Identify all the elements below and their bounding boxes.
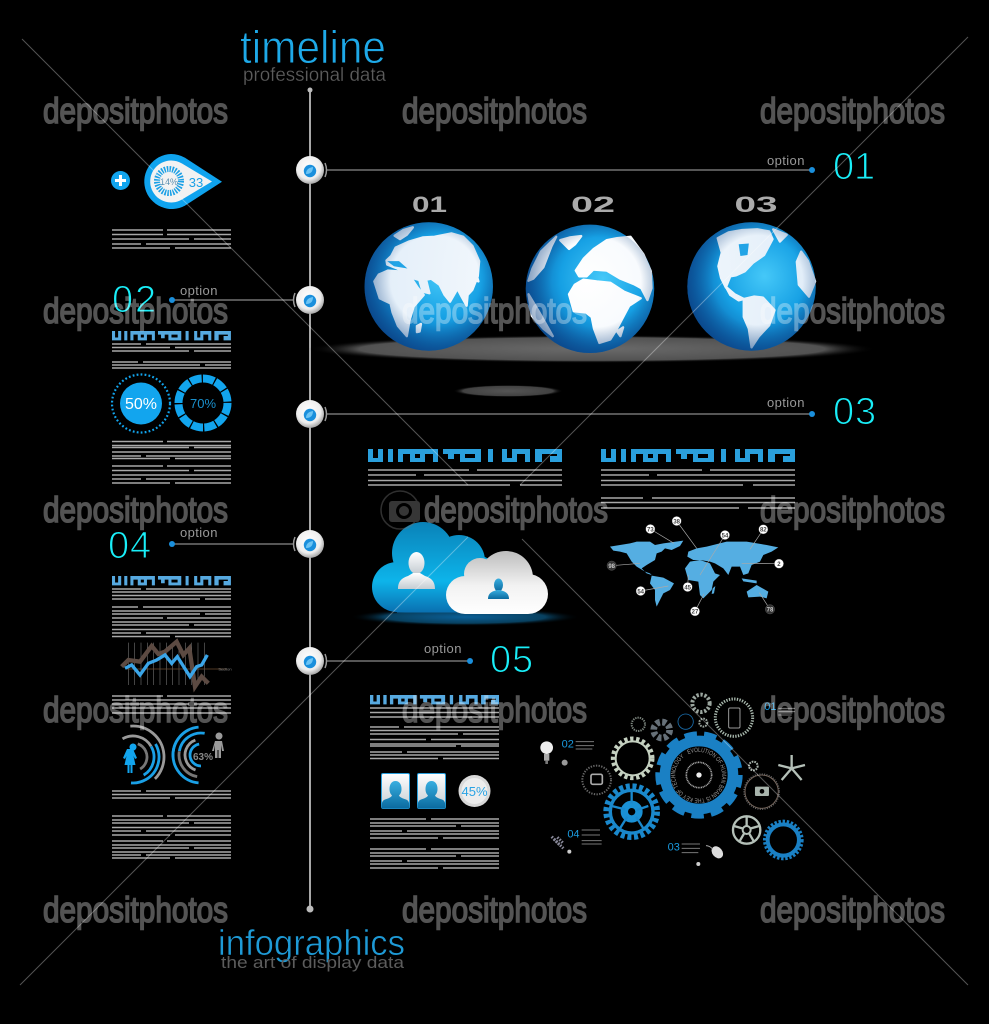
main blue gear [655,731,743,819]
connector 02 [112,279,294,321]
heading bar [370,695,499,704]
timeline node 1 [296,156,326,184]
connector 04 [108,525,294,567]
timeline node 4 [294,530,324,558]
gear label 01 [764,701,795,715]
map callouts: 54 [637,589,645,595]
connector 03: 03 [833,391,876,433]
label 01: 01 [412,192,447,217]
chart: radial arcs with female figure [97,721,169,793]
text lines [370,708,499,758]
icon: portrait 1 [382,774,410,808]
blue cog [606,786,657,837]
watermarks [43,90,945,930]
text lines [112,344,231,368]
watermarks: depositphotos [424,489,608,530]
text lines [112,230,231,248]
watermarks: depositphotos [402,90,587,131]
icon: watermark camera [381,491,420,529]
map callouts: 78 [767,608,774,614]
icon: female figure [123,744,137,773]
chart: world map with callouts [607,516,784,616]
phone cog [715,699,753,736]
icon: light bulb [540,741,553,764]
watermarks: depositphotos [760,90,945,131]
camera cog [744,774,779,809]
map callouts: 82 [760,528,767,534]
globe 2 [526,225,654,353]
icon: clouds with users [350,522,580,626]
floor shadows under globes [308,335,876,397]
connector 02: option [180,283,218,298]
heading bar [112,576,231,585]
connector 01 [326,146,875,188]
heading bar [112,331,231,340]
connector 05 [326,639,533,681]
heading bar [601,449,795,462]
icon: male figure [212,733,224,758]
watermarks: depositphotos [760,889,945,930]
watermarks: depositphotos [43,290,228,331]
timeline node 2 [294,286,324,314]
watermarks: depositphotos [760,489,945,530]
title: timeline: timeline [240,21,386,73]
chart: 70% ring [178,378,228,428]
watermarks: depositphotos [402,889,587,930]
text lines [601,470,795,508]
connector 05: 05 [490,639,533,681]
gear label 03 [668,842,700,866]
chart: 45% badge: 45% [461,784,488,799]
icon: location pin with percentage: 33 [189,175,203,190]
connector 03 [326,391,876,433]
gear label 02 [562,739,594,766]
icon: dotted arrow [552,837,563,848]
panel: middle text right [601,449,795,508]
gear label 04 [567,828,602,854]
map callouts: 73 [647,527,654,533]
map callouts: 54 [722,533,729,539]
watermarks: depositphotos [760,290,945,331]
chart: radial arcs with male figure and 63% [171,725,231,785]
icon: user silhouette [398,552,435,589]
gear label 03: 03 [668,842,680,854]
title: infographics: infographics [218,922,405,963]
icon: blue cloud [372,522,496,612]
map leader lines [612,521,779,611]
label 03: 03 [734,192,778,217]
watermarks: depositphotos [760,689,945,730]
icon: mouse [706,844,725,861]
text lines [112,696,231,713]
title: timeline: professional data [243,65,386,86]
gear label 02: 02 [562,739,574,751]
connector 01: option [767,153,805,168]
main blue gear: EVOLUTION OF HUMAN BRAIN IS THE KEY OF TECHNOLOGY [670,748,726,803]
icon: plus button [111,171,130,190]
pale cog [613,739,652,778]
map callouts: 38 [673,519,681,525]
map callouts: 27 [692,610,699,616]
label 02: 02 [571,192,615,217]
star wheel [778,755,805,780]
chart: 50% ring [112,374,170,432]
chart: 45% badge [458,775,490,807]
spoked wheel [733,816,760,844]
panel: section 05 text [370,695,499,868]
chart: 50% ring: 50% [125,396,157,413]
connector 04: option [180,525,218,540]
dark cog with screen icon [582,766,611,794]
title: infographics: the art of display data [221,953,405,972]
text lines [112,442,231,483]
icon: location pin with percentage: 14% [160,177,178,187]
map callouts: 98 [608,564,616,570]
chart: 70% ring: 70% [190,396,216,411]
icon: portrait 2 [418,774,446,808]
gear label 04: 04 [567,828,580,840]
gear label 01: 01 [764,701,777,713]
vertical timeline axis [306,88,314,912]
globe 3 [687,222,816,351]
text lines [368,470,562,485]
connector 03: option [767,395,805,410]
watermarks: depositphotos [43,489,228,530]
watermarks: depositphotos [402,290,587,331]
chart: gear diagram [540,692,806,866]
icon: user silhouette [488,578,509,599]
panel: left column [97,154,232,858]
map land [610,541,778,607]
panel: globes [365,192,816,353]
watermarks: depositphotos [43,90,228,131]
timeline node 5 [296,647,326,675]
text lines [370,819,499,868]
map callouts: 2 [777,562,781,568]
small cogs [632,695,758,770]
chart: line chart [122,642,232,687]
watermarks: depositphotos [43,889,228,930]
icon: white cloud [446,551,548,614]
connector 02: 02 [112,279,156,321]
map callouts [607,516,784,616]
connector 04: 04 [108,525,151,567]
icon: location pin with percentage [144,154,222,209]
connector 01: 01 [833,146,875,188]
chart: line chart: Section [218,667,232,672]
chart: radial arcs with male figure and 63%: 63% [193,752,213,763]
heading bar [368,449,562,462]
connector 05: option [424,641,462,656]
timeline node 3 [296,400,326,428]
text lines [112,791,231,858]
panel: middle text left [368,449,562,485]
blue ring cog [765,822,801,858]
watermarks: depositphotos [43,689,228,730]
watermarks: depositphotos [402,689,587,730]
globe 1 [365,222,493,351]
text lines [112,589,231,636]
map callouts: 45 [684,585,692,591]
